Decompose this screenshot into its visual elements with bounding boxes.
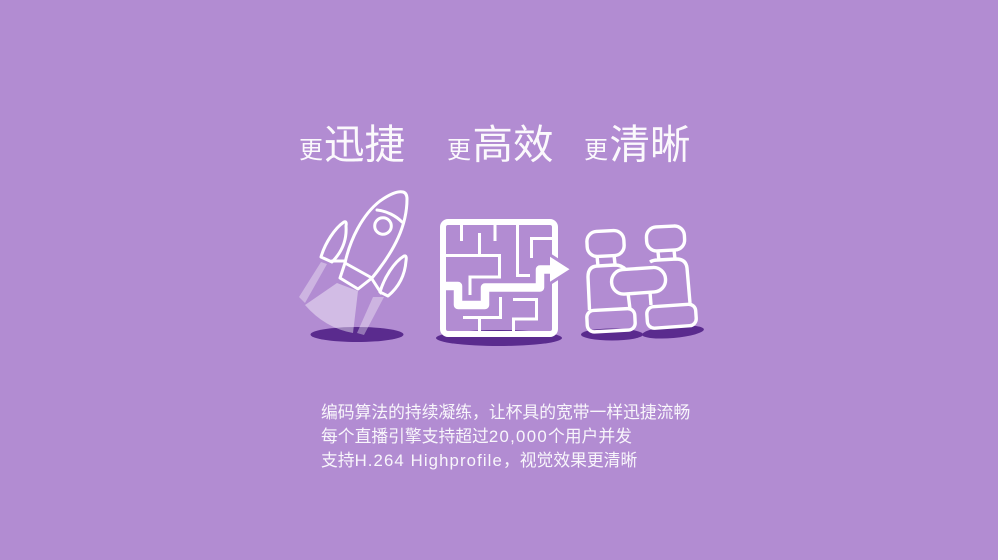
description text: 编码算法的持续凝练，让杯具的宽带一样迅捷流畅	[321, 399, 690, 423]
maze route	[443, 257, 570, 305]
icon: maze with arrow	[436, 222, 570, 346]
icon: rocket	[299, 192, 407, 342]
heading: faster: 迅捷	[324, 122, 405, 168]
heading: clearer: 清晰	[610, 122, 690, 168]
heading: more efficient: 更	[447, 137, 471, 164]
description text	[321, 399, 690, 471]
description text: 支持H.264 Highprofile，视觉效果更清晰	[321, 447, 637, 471]
icon: binoculars	[581, 225, 704, 341]
heading: faster: 更	[299, 137, 323, 164]
heading: more efficient: 高效	[472, 122, 554, 168]
description text: 每个直播引擎支持超过20,000个用户并发	[321, 427, 632, 446]
heading: clearer: 更	[584, 137, 608, 164]
